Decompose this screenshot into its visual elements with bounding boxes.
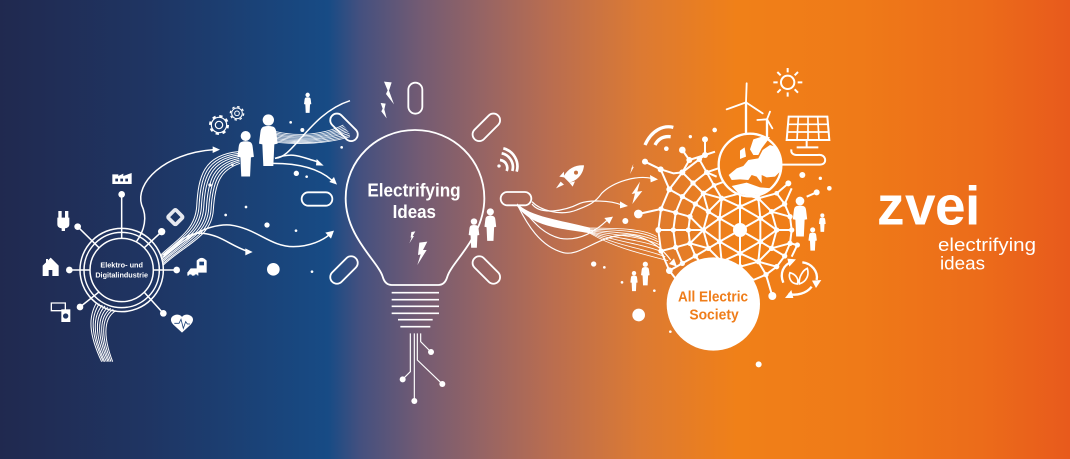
icon: factory xyxy=(112,173,132,184)
All Electric Society label: Society xyxy=(689,308,739,324)
bulb title: Ideas xyxy=(393,201,436,222)
icon: recycling leaves xyxy=(782,259,821,298)
people at bulb edge xyxy=(469,208,496,248)
people xyxy=(237,93,311,176)
icon: screen and appliance xyxy=(51,303,70,322)
icon: globe with Europe xyxy=(719,134,782,196)
dots xyxy=(591,128,832,367)
bulb title: Electrifying xyxy=(367,180,461,201)
hub label: Elektro- und xyxy=(100,261,143,270)
hub spoke nodes xyxy=(66,191,180,317)
All Electric Society label xyxy=(678,290,748,324)
logo: zvei electrifying ideas xyxy=(877,174,1036,274)
icon: heart with pulse xyxy=(171,315,193,333)
icon: wifi xyxy=(497,148,517,172)
bulb screw base xyxy=(392,293,439,327)
icon: wind turbines xyxy=(727,83,772,137)
hub label xyxy=(95,261,148,279)
panel: All Electric Society network xyxy=(517,68,832,367)
circuit traces xyxy=(400,333,445,404)
arrowheads xyxy=(604,175,677,267)
icon: lightning bolts inside bulb xyxy=(409,231,427,265)
icon: train and car xyxy=(187,258,207,278)
hub label: Digitalindustrie xyxy=(95,270,148,279)
icon: lightning bolts xyxy=(630,164,642,204)
icon: sun xyxy=(773,68,802,97)
dots xyxy=(208,121,343,276)
mesh network xyxy=(638,139,817,296)
icon: house xyxy=(43,258,59,276)
people xyxy=(630,197,826,291)
logo tagline: electrifying xyxy=(938,234,1036,255)
icon: plug xyxy=(57,211,69,231)
wire bundle below hub xyxy=(91,303,116,362)
icon: rocket xyxy=(556,165,584,188)
hub rings and spokes xyxy=(69,194,177,313)
arrows out of hub xyxy=(136,101,350,257)
icon: chip xyxy=(168,209,183,225)
All Electric Society label: All Electric xyxy=(678,290,748,306)
logo tagline: ideas xyxy=(940,252,985,274)
capsule light rays xyxy=(302,83,531,286)
icon: gears xyxy=(210,107,244,134)
wire bundle to people xyxy=(161,152,240,265)
mesh nodes xyxy=(634,136,820,300)
icon: lightning bolts above bulb xyxy=(381,82,394,118)
panel: Elektro- und Digitalindustrie hub network xyxy=(43,93,350,362)
All Electric Society circle xyxy=(667,257,760,351)
logo wordmark: zvei xyxy=(877,174,980,236)
arrowheads xyxy=(213,146,337,255)
thick wire bundle xyxy=(517,203,668,261)
icon: solar panel with cable xyxy=(781,117,829,165)
bulb outline xyxy=(346,130,484,285)
panel: light bulb xyxy=(302,82,531,404)
icon: wifi xyxy=(645,127,673,151)
fine wires between person and capsule xyxy=(276,125,350,144)
flow arrows from bulb xyxy=(518,177,671,260)
bulb title xyxy=(367,180,461,222)
logo tagline xyxy=(938,234,1036,274)
